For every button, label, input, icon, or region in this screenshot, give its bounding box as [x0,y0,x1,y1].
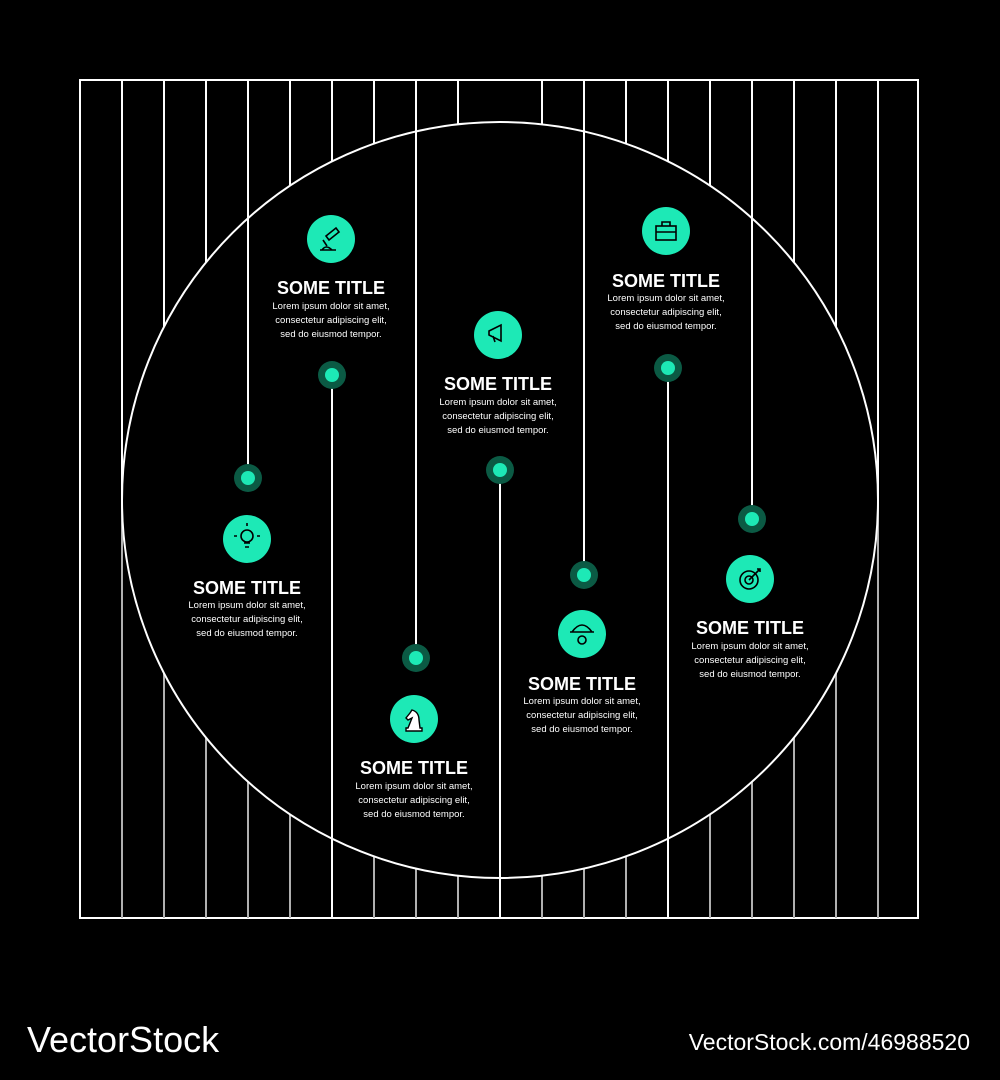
item 1: microscope [272,215,390,340]
frame grid [80,80,918,918]
item 3: briefcase: SOME TITLE [612,271,720,291]
item 2: megaphone: SOME TITLE [444,374,552,394]
item 7: target: sed do eiusmod tempor. [699,669,801,680]
item 6: helmet gear: consectetur adipiscing elit, [526,710,638,721]
item 4: lightbulb [188,515,306,639]
item 5: chess knight [355,695,473,820]
item 3: briefcase: Lorem ipsum dolor sit amet, [607,293,725,304]
item 4: lightbulb: SOME TITLE [193,578,301,598]
item 3: briefcase: sed do eiusmod tempor. [615,321,717,332]
item 2: megaphone: Lorem ipsum dolor sit amet, [439,397,557,408]
item 2: megaphone: consectetur adipiscing elit, [442,411,554,422]
item 4: lightbulb: consectetur adipiscing elit, [191,614,303,625]
item 7: target [691,555,809,680]
item 2: megaphone [439,311,557,436]
item 1: microscope: SOME TITLE [277,278,385,298]
item 5: chess knight: SOME TITLE [360,758,468,778]
item 4: lightbulb: sed do eiusmod tempor. [196,628,298,639]
item 1: microscope: Lorem ipsum dolor sit amet, [272,301,390,312]
item 1: microscope: sed do eiusmod tempor. [280,329,382,340]
item 3: briefcase: consectetur adipiscing elit, [610,307,722,318]
item 5: chess knight: consectetur adipiscing elit, [358,795,470,806]
item 5: chess knight: sed do eiusmod tempor. [363,809,465,820]
item 1: microscope: consectetur adipiscing elit, [275,315,387,326]
item 5: chess knight: Lorem ipsum dolor sit amet, [355,781,473,792]
item 7: target: SOME TITLE [696,618,804,638]
item 6: helmet gear: Lorem ipsum dolor sit amet, [523,696,641,707]
item 7: target: Lorem ipsum dolor sit amet, [691,641,809,652]
dots [234,354,766,672]
item 6: helmet gear [523,610,641,735]
item 3: briefcase [607,207,725,332]
item 6: helmet gear: sed do eiusmod tempor. [531,724,633,735]
item 6: helmet gear: SOME TITLE [528,674,636,694]
footer logo: VectorStock [27,1019,220,1060]
item 7: target: consectetur adipiscing elit, [694,655,806,666]
footer url: VectorStock.com/46988520 [689,1029,970,1055]
item 2: megaphone: sed do eiusmod tempor. [447,425,549,436]
item 4: lightbulb: Lorem ipsum dolor sit amet, [188,600,306,611]
